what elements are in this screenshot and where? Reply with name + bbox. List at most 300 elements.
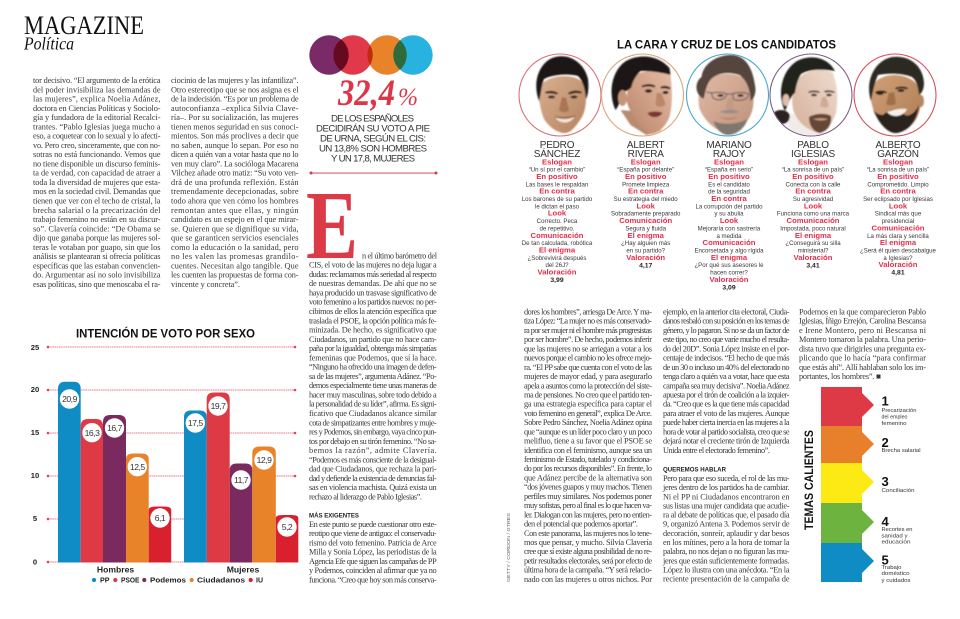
article text: column 5: tenga claro a quién va a votar, hace que esta [663,372,790,381]
candidate card: Pedro Sánchez: El enigma [539,246,576,254]
candidate card: Pedro Sánchez: Look [548,209,567,218]
article text: column 1: esas políticas, sino que menoscaba el ra- [33,280,161,289]
article text: column 2: ría–. Por su socialización, las mujeres [171,113,298,122]
article text: column 1: ta de verdad, con capacidad de atraer a [33,169,161,178]
hot topics list: del empleo [882,414,908,420]
candidate card: Alberto Garzón: Sindical más que [875,211,922,218]
candidate card: Alberto Garzón: En positivo [877,172,919,181]
candidate card: Alberto Garzón: ALBERTO [876,140,921,151]
article text: column 4: apela a asuntos como la protección del siste- [524,381,652,390]
hot topics list: 1 [882,394,889,408]
article text: column 1: mos en la sociedad civil. Demandas que [33,187,161,196]
article text: column 5: campaña sea muy decisiva”. Noelia Adánez [663,381,790,390]
candidate card: Mariano Rajoy: En positivo [708,172,750,181]
article text: column 3: Agencia Efe que siguen las campañas de PP [309,557,437,566]
article text: column 1: tienen que ver con el techo de cristal, la [33,196,161,206]
article text: column 2: ven muy claro”. La socióloga Macarena [171,159,299,168]
candidate card: Alberto Garzón: a Iglesias? [883,255,913,262]
chart legend: PSOE [121,578,140,584]
candidate card: Albert Rivera: Look [637,201,656,210]
article text: column 5: Pero para que eso suceda, el rol de las mu- [663,474,790,483]
portrait: Mariano Rajoy [686,54,768,136]
article text: column 3: sas en violencia machista. Quizá exista un [309,483,438,492]
article text: column 4: feminismo de Estado, tutelado y condiciona- [524,455,652,464]
candidate card: Mariano Rajoy: MARIANO [706,140,752,151]
article text: column 6: e Irene Montero, pero ni Bescansa ni [799,326,927,335]
masthead: Magazine Política [23,11,144,54]
article text: column 3: reotipo que viene de antiguo: el conservadu- [309,529,437,538]
candidate card: Pablo Iglesias: “La sonrisa de un país” [782,167,844,174]
article text: column 3: voto femenino a los partidos nuevos: no per- [309,298,437,307]
candidate card: Alberto Garzón: GARZÓN [877,147,919,160]
article text: column 2: candidato es un espejo en el que mirar- [171,215,299,224]
article text: column 4: identifica con el feminismo, aunque sea un [524,446,653,455]
article text: column 4: mujeres de mayor edad, y para asegurarlo [524,372,652,381]
article text: column 2: les cuenten las propuestas de forma con- [171,271,299,280]
article text: column 3 [309,251,438,584]
article text: column 1: trantes. “Pablo Iglesias juega mucho a [33,122,161,131]
article text: column 1: trabajo femenino no están en su discur- [33,215,161,224]
article text: column 3: de nuestras demandas. De ahí que no se [309,279,437,288]
article text: column 1: no tiene disponible un discurso feminis- [33,159,161,168]
article text: column 3: res y Podemos, sin embargo, vaya cinco pun- [309,428,437,436]
chart legend: Ciudadanos [197,578,245,584]
candidate card: Pedro Sánchez: Los barones de su partido [522,196,593,203]
article text: column 5: López lo ilustra con una anécdota. “En la [663,565,790,574]
hot topics list: femenino [882,421,906,427]
article text: column 5: 9, organizó Antena 3. Podemos servir de [663,520,790,529]
bar chart: vote intention by sex: 5 [33,514,38,523]
candidate card: Mariano Rajoy: El enigma [711,253,748,262]
bar chart: vote intention by sex: 17,5 [188,418,203,428]
article text: column 4: muy sofistas, pero al final es lo que hacen va- [524,501,652,510]
article text: column 4: Sobre Pedro Sánchez, Noelia Adánez opina [524,418,652,427]
candidate card: Alberto Garzón: presidencial [882,218,914,225]
article text: column 3: sa de las mujeres”, argumenta Adánez. “Po- [309,372,437,381]
bar chart: vote intention by sex: 25 [31,343,40,352]
candidate card: Pablo Iglesias: En contra [795,187,831,196]
article text: column 2: se. Quieren que se dignifique su vida, [171,224,298,233]
candidate card: Alberto Garzón: El enigma [880,238,917,247]
drop cap E: E [306,172,358,280]
chart legend [92,578,263,584]
article text: column 4: ga una estrategia específica para captar el [524,400,653,409]
article text: column 3: rismo del voto femenino. Patricia de Arce [309,538,437,547]
bar chart: vote intention by sex: Mujeres [227,564,259,574]
article text: column 5: decoración, sonreír, aplaudir y dar besos [663,529,790,538]
article text: column 3: tos por debajo en su tirón femenino. “No sa- [309,437,437,446]
article text: column 5: jeres que están suficientemente formadas. [662,556,790,565]
article text: column 5: en los mítines, pero a la hora de tomar la [663,538,790,547]
article text: column 5: ejemplo, en la anterior cita electoral, Ciuda- [663,308,790,316]
big statistic: 32,4 %: % [398,84,418,111]
article text: column 1: gía y fundadora de la editorial Recalci- [33,113,161,122]
article text: column 4: tiza López: “La mujer no es más conservado- [524,317,652,326]
hot topics list: 5 [882,552,889,568]
bar chart: vote intention by sex: 6,1 [155,513,166,523]
bar chart: vote intention by sex: 16,7 [107,423,123,433]
article text: column 3: bemos la razón”, admite Clavería. [309,446,437,455]
hot topics list: 4 [882,514,890,529]
candidate card: Albert Rivera: 4,17 [639,262,653,269]
candidate card: Alberto Garzón: 4,81 [891,270,905,277]
article text: column 4: voto femenino en general”, explica De Arce. [524,409,652,418]
candidate card: Pedro Sánchez: En contra [539,187,575,196]
article text: column 4: Con este panorama, las mujeres nos lo tene- [524,529,652,538]
article text: column 2: de la indecisión. “Es por un problema de [171,94,299,104]
candidate card: Mariano Rajoy [694,140,764,291]
vertical heading: Temas calientes: TEMAS CALIENTES [804,430,816,530]
candidate card: Mariano Rajoy: a medida [716,233,742,240]
candidate card: Pablo Iglesias: IGLESIAS [791,149,836,160]
candidate card: Alberto Garzón: La más clara y sencilla [867,233,929,240]
candidate card: Pedro Sánchez: 3,99 [550,277,564,284]
article text: column 3: traslada el PSOE, la opción política más fe- [309,316,437,325]
article text: column 1: las mujeres”, explica Noelia Adánez, [33,94,160,104]
article text: column 4: nuevos porque el cambio no les ofrece mejo- [524,354,652,363]
candidate card: Albert Rivera: Comunicación [619,216,672,225]
article text: column 6: Montero tomaron la palabra. Una perio- [799,335,926,344]
bar chart: vote intention by sex: 16,3 [85,428,100,438]
bar chart: vote intention by sex: 10 [31,471,39,480]
candidate card: Mariano Rajoy: de la seguridad [708,189,750,196]
candidate card: Alberto Garzón: Eslogan [883,157,913,166]
article text: column 2: cuentes. Necesitan algo tangible. Que [171,261,299,270]
article text: column 4: petir resultados electorales, será por efecto de [524,556,652,565]
stacked arrows: hot topics [821,387,874,582]
article text: column 2: no les valen las promesas grandilo- [171,252,299,261]
candidate card: Alberto Garzón: Look [889,201,908,210]
candidate card: Pablo Iglesias: Conecta con la calle [786,181,841,188]
article text: column 1 [33,76,161,289]
article text: column 6: Podemos en la que comparecieron Pablo [799,308,926,316]
article text: column 6: plicando que lo hacía “para confirmar [799,354,926,363]
candidate card: Albert Rivera: “España por delante” [617,167,674,174]
article text: column 3: cota de simpatizantes entre hombres y muje- [309,418,437,427]
candidate card: Alberto Garzón [860,140,937,277]
candidate card: Albert Rivera: Eslogan [631,157,661,166]
article text: column 1: toda la diversidad de mujeres que esta- [33,178,161,187]
hot topics list: y cuidados [882,578,911,584]
article text: column 3: Ciudadanos, un partido que no hace cam- [309,335,437,344]
candidate card: Albert Rivera: Su estrategia del miedo [614,196,678,203]
candidate card: Pedro Sánchez [522,140,593,284]
article text: column 6: Iglesias, Íñigo Errejón, Carolina Bescansa [799,316,926,326]
article text: column 6 [799,308,927,381]
candidate card: Alberto Garzón: Comunicación [872,223,925,232]
article text: column 1: doctora en Ciencias Políticas y Sociolo- [33,104,161,113]
photo credit: GETTY / CORDON / GTRES [506,513,512,582]
article text: column 2: que se garanticen servicios esenciales [171,234,298,243]
candidate card: Pablo Iglesias: En positivo [792,172,834,181]
candidate card: Pablo Iglesias: Impostada, poco natural [780,225,846,232]
big statistic: 32,4 %: 32,4 [337,73,395,114]
candidate card: Pedro Sánchez: ¿Sobrevivirá después [528,255,586,262]
candidate card: Alberto Garzón: En contra [880,187,916,196]
statistic caption [316,114,430,164]
hot topics list: sanidad y [882,533,908,539]
article text: column 1: do. Argumentar así no solo invisibiliza [33,271,161,280]
article text: column 5: ra al debate de políticas que, el pasado día [663,511,790,520]
candidate card: Alberto Garzón: ¿Será él quien descabalgue [860,248,937,254]
article text: column 3: n el último barómetro del [362,251,438,260]
candidate card: Pedro Sánchez: En positivo [536,172,578,181]
article text: column 3: paña por la igualdad, obtenga más simpatías [309,344,437,353]
candidate card: Pablo Iglesias: PABLO [797,140,829,151]
candidate card: Mariano Rajoy: La corrupción del partido [695,203,763,210]
article text: column 4: ler. Dialogan con las mujeres, pero no entien- [524,510,652,519]
article text: column 5 [662,308,790,584]
masthead: Magazine Política: Política [23,34,74,54]
article text: column 1: sotras no está funcionando. Vemos que [33,150,161,159]
article text: column 3: rechazo al liderazgo de Pablo Iglesias”. [309,492,422,501]
chart legend: PP [100,578,110,584]
hot topics list: Precarización [882,408,916,414]
article text: column 2: drá de una profunda reflexión. Están [171,178,299,187]
article text: column 3: dad que Ciudadanos, que rechaza la pari- [309,465,437,474]
candidate card: Mariano Rajoy: RAJOY [713,149,746,160]
statistic caption: UN 13,8% SON HOMBRES [319,144,427,154]
bar chart: vote intention by sex: 20,9 [62,394,78,404]
candidate card: Pablo Iglesias: ministerial? [798,248,829,254]
candidate card: Mariano Rajoy: y su abulia [714,211,744,218]
article text: column 4 [524,308,653,584]
article text: column 2: tienen menos seguridad en sus conoci- [171,122,299,131]
article text: column 4: do por los recursos disponibles”. En frente, lo [524,464,652,473]
article text: column 1: eso, a coquetear con lo sexual y lo afecti- [33,132,161,141]
chart legend: IU [256,578,263,584]
candidate card: Pedro Sánchez: “Un sí por el cambio” [529,167,585,174]
hot topics list: Recortes en [882,527,912,533]
hot topics list: Brecha salarial [882,448,920,454]
candidate card: Albert Rivera: El enigma [628,231,665,240]
article text: column 5: dejará notar el creciente tirón de Izquierda [663,437,790,446]
article text: column 4: ma de pensiones. No creo que el partido ten- [524,390,652,400]
candidate card: Mariano Rajoy: hacen correr? [710,270,748,276]
candidate card: Mariano Rajoy: Valoración [710,275,749,284]
candidate card: Pedro Sánchez: Las bases le respaldan [526,181,588,188]
article text: column 4: que las mujeres no se arriegan a votar a los [524,344,652,353]
article text: column 2: dicen a quién van a votar hasta que no lo [171,150,298,159]
article text: column 5: palabra, no nos dejan o no figuran las mu- [663,547,790,556]
candidate card: Pedro Sánchez: de repetitivo. [540,225,575,232]
candidate card: Pablo Iglesias: 3,41 [806,262,820,269]
article text: column 3: la personalidad de su líder”, afirma. Es signi- [309,400,437,409]
candidate card: Mariano Rajoy: Es el candidato [708,181,750,188]
article text: column 2: todo ahora que ven cómo los hombres [171,196,298,206]
hot topics list: 2 [882,435,889,450]
article text: column 4: den el potencial que podemos aportar”. [524,520,638,529]
article text: column 1: brecha salarial o la precarización del [33,206,161,215]
masthead: Magazine Política: MAGAZINE [24,11,144,40]
candidate card: Pedro Sánchez: Eslogan [542,157,572,166]
article text: column 4: última hora de la campaña. “Y será relacio- [524,566,652,575]
candidate card: Albert Rivera: Valoración [626,253,665,262]
article text: column 1: del poder invisibiliza las demandas de [33,85,161,94]
statistic caption: DE URNA, SEGÚN EL CIS: [320,134,426,144]
candidate card: Mariano Rajoy: Mejoraría con sastrería [698,225,761,232]
article text: column 5: do del 20D”. Sonia López insiste en el por- [663,344,790,353]
article text: column 4: perfiles muy similares. Nos podemos poner [524,492,652,501]
candidate card: Albert Rivera: Segura y fluida [625,225,667,232]
candidate card: Pablo Iglesias [777,140,850,269]
candidate card: Albert Rivera: En positivo [625,172,667,181]
portrait: Albert Rivera [602,54,684,136]
article text: column 2: ciocinio de las mujeres y las infantiliza”. [171,76,298,85]
article text: column 4: nado con las mujeres u otros nichos. Por [524,575,652,584]
candidate card: Albert Rivera: ¿Hay alguien más [621,240,670,247]
bar chart: vote intention by sex: 0 [33,558,37,566]
bar chart: vote intention by sex: 11,7 [234,475,249,485]
article text: column 2: Otro estereotipo que se nos asigna es el [171,85,299,94]
divider with end dots [310,172,438,174]
article text: column 3: funciona. “Creo que hoy son más conserva- [309,575,437,584]
article text: column 1: tor decisivo. “El argumento de la erótica [33,76,161,85]
article text: column 3: haya producido un trasvase significativo de [309,288,437,298]
portrait: Pedro Sánchez [519,54,601,136]
article text: column 4: por ser hombre”. De hecho, podemos inferir [524,335,652,344]
candidate card: Albert Rivera: ALBERT [627,140,665,151]
article text: column 4: que Adánez percibe de la alternativa son [524,474,653,482]
hot topics list: Conciliación [882,488,914,494]
article text: column 5: jeres dentro de los partidos ha de cambiar. [662,483,790,492]
article text: column 3: y Podemos, coinciden al afirmar que ya no [309,566,437,575]
bar chart: vote intention by sex: 20 [31,385,39,394]
chart legend: Podemos [150,578,186,584]
statistic caption: Y UN 17,8, MUJERES [331,154,415,164]
article text: column 3: femeninas que Podemos, que sí la hace. [309,353,437,362]
portrait: Pablo Iglesias [770,54,852,137]
bar chart: vote intention by sex: 15 [31,428,40,437]
candidate card: Alberto Garzón: Valoración [879,260,918,269]
article text: column 6: portantes, los hombres”. ■ [799,372,881,381]
hot topics list [882,394,920,584]
article text: column 1: so”. Clavería coincide: “De Obama se [33,224,161,233]
candidate card: Pedro Sánchez: PEDRO [540,140,575,151]
hot topics list: doméstico [882,571,910,577]
article text: column 5: hora de votar al partido socialista, creo que se [663,427,790,436]
article text: column 5: Unida entre el electorado femenino”. [663,446,770,455]
candidate card: Pedro Sánchez: Valoración [538,268,577,276]
article text: column 5: puede haber cierta inercia en las mujeres a la [663,418,790,427]
article text: column 4: ra por ser mujer ni el hombre más progresistas [524,326,652,335]
article text: column 1: dijo que ganaba porque las mujeres sol- [33,234,161,243]
candidate card: Pablo Iglesias: ¿Conseguirá su silla [785,240,841,247]
article text: column 5: da. “Creo que es la que tiene más capacidad [663,400,790,409]
statistic caption: DECIDIRÁN SU VOTO A PIE [316,124,430,134]
candidate card: Pablo Iglesias: Look [804,201,823,210]
article text: column 5: género, y lo pagaron. Si no se da un factor de [663,326,790,335]
article text: column 5: danos resbaló con su posición en los temas de [663,317,790,326]
chart title: INTENCIÓN DE VOTO POR SEXO [76,326,255,340]
article text: column 6: que estás ahí”. Allí hablaban solo los im- [799,363,926,372]
article text: column 5: reciente presentación de la campaña de [663,575,790,584]
article text: column 3: ficativo que Ciudadanos alcance similar [309,409,437,418]
candidate card: Pablo Iglesias: Funciona como una marca [777,211,850,218]
candidate card: Albert Rivera [611,140,681,269]
article text: column 3: Milla y Sonia López, las periodistas de la [309,548,437,557]
article text: column 4: que “aunque es un líder poco claro y un poco [524,427,652,436]
article text: column 2: tremendamente decepcionadas, sobre [171,187,299,196]
article text: column 3: “Ninguno ha ofrecido una imagen de defen- [309,363,437,372]
bar chart: vote intention by sex: 19,7 [211,401,226,411]
bar chart: vote intention by sex: 5,2 [282,522,293,532]
article text: column 1: específicas que las estaban convencien- [33,261,161,270]
article text: column 3: CIS, el voto de las mujeres no deja lugar a [309,261,437,270]
hot topics list: Trabajo [882,565,902,571]
bar chart: vote intention by sex: 12,5 [130,462,145,472]
article text: column 5: para atraer el voto de las mujeres. Aunque [663,409,790,418]
candidate card: Pedro Sánchez: Correcto. Peca [537,218,578,225]
candidate card: Mariano Rajoy: “España en serio” [705,167,753,174]
article text: column 2: autoconfianza –explica Silvia Clave- [171,104,299,113]
article text: column 1: análisis se plantearan si ofrecía políticas [33,252,160,261]
article text: column 2: no saben, aunque lo sepan. Por eso no [171,141,298,150]
article text: column 5: Ni el PP ni Ciudadanos encontraron en [663,492,790,501]
candidate card: Mariano Rajoy: Comunicación [703,238,756,247]
candidate card: Alberto Garzón: “La sonrisa de un país” [867,167,929,174]
candidate card: Pablo Iglesias: Comunicación [787,216,840,225]
hot topics list: 3 [882,474,889,489]
candidate card: Mariano Rajoy: En contra [711,194,747,203]
candidate card: Pablo Iglesias: Eslogan [798,157,828,166]
article text: column 3: En este punto se puede cuestionar otro este- [309,520,437,529]
candidate card: Mariano Rajoy: Eslogan [714,157,744,166]
article text: column 3: minizada. De hecho, es significativo que [309,326,437,335]
candidate card: Pablo Iglesias: Su agresividad [793,196,833,203]
subheading: Queremos hablar: QUEREMOS HABLAR [663,466,726,474]
candidate card: Alberto Garzón: Comprometido. Limpio [867,181,929,188]
article text: column 3: dudas: reclamamos más seriedad al respecto [309,270,437,279]
article text: column 5: sus listas una mujer candidata que acudie- [663,501,790,510]
candidate card: Albert Rivera: Promete limpieza [622,181,670,188]
candidate card: Mariano Rajoy: ¿Por qué sus asesores le [694,262,764,269]
candidate card: Pablo Iglesias: Valoración [794,253,833,262]
article text: column 4: cree que sí existe alguna posibilidad de no re- [524,547,652,556]
candidate card: Pedro Sánchez: le dictan el paso [535,203,580,210]
article text: column 5: centaje de indecisos. “El hecho de que más [663,354,790,363]
statistic caption: DE LOS ESPAÑOLES [331,114,414,124]
article text: column 4: “dos jóvenes guapos y muy machos. Tienen [524,483,653,492]
candidate card: Albert Rivera: Sobradamente preparado [611,211,681,218]
section title: candidates: LA CARA Y CRUZ DE LOS CANDIDATOS [617,38,836,52]
candidate card: Alberto Garzón: Ser eclipsado por Iglesias [863,196,933,203]
candidate card: Mariano Rajoy: Encorsetada y algo rígida [694,248,764,254]
article text: column 4: dores los hombres”, arriesga De Arce. Y ma- [524,308,652,316]
article text: column 5: este tipo, no creo que varíe mucho el resulta- [663,335,790,344]
bar chart: vote intention by sex: Hombres [97,564,134,574]
article text: column 1: teras le votaban por guapo, sin que los [33,243,160,252]
article text: column 4: ra. “El PP sabe que cuenta con el voto de las [524,363,652,372]
bar chart: vote intention by sex: 12,9 [257,455,272,465]
candidate card: Mariano Rajoy: 3,09 [722,284,736,291]
article text: column 2: vincente y concreta”. [171,280,240,289]
article text: column 3: dad y defiende la existencia de denuncias fal- [309,474,437,483]
article text: column 2 [171,76,299,289]
article text: column 4: mos que pensar, y mucho. Silvia Clavería [524,538,652,547]
candidate card: Albert Rivera: RIVERA [628,149,664,160]
hot topics list: educación [882,540,911,546]
article text: column 2: mientos. Son más proclives a decir que [171,132,299,141]
candidate card: Pedro Sánchez: Comunicación [531,231,584,240]
article text: column 2: como la educación o la sanidad, pero [171,243,298,252]
subheading: Más exigentes: MÁS EXIGENTES [309,510,360,520]
icon: four overlapping party circles [309,35,433,75]
article text: column 2: remontan antes que ellas, y ningún [171,206,299,215]
candidate card: Pablo Iglesias: El enigma [795,231,832,240]
article text: column 6: dista tuvo que dirigirles una pregunta ex- [799,344,926,353]
bar chart: vote intention by sex [31,343,298,574]
